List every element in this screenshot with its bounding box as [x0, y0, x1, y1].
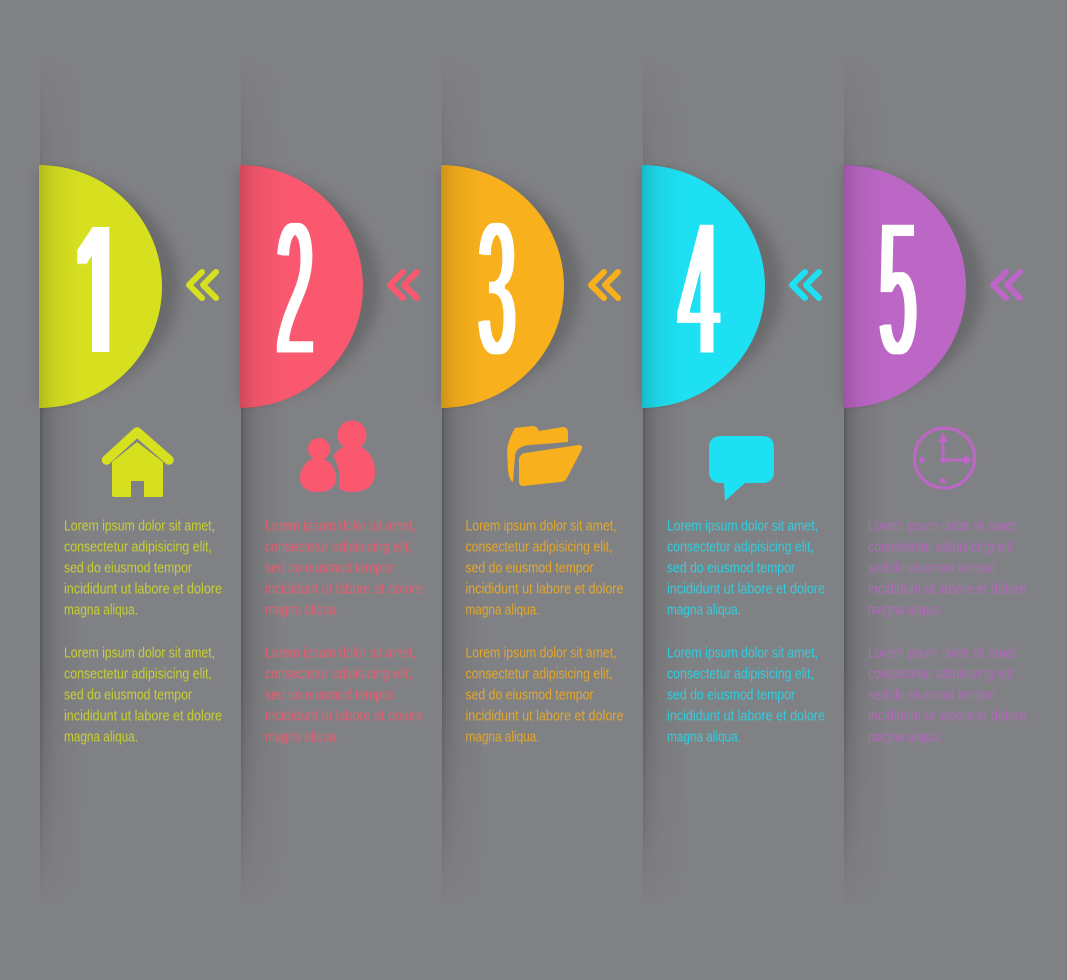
panel: step 1 [39, 165, 222, 746]
text block: sed do eiusmod tempor [868, 561, 996, 577]
text block: consectetur adipisicing elit [868, 667, 1013, 683]
panel: step 4 [642, 165, 825, 746]
text block: incididunt ut labore et dolore [667, 709, 825, 725]
text block: consectetur adipisicing elit, [265, 667, 412, 683]
text block: incididunt ut labore et dolore [667, 582, 825, 598]
semicircle shadow [642, 170, 782, 402]
text block: sed do eiusmod tempor [667, 688, 795, 704]
text block: sed do eiusmod tempor [64, 688, 192, 704]
text block: consectetur adipisicing elit, [265, 540, 412, 556]
text block: incididunt ut labore et dolore [466, 582, 624, 598]
text block: incididunt ut labore et dolore [64, 582, 222, 598]
text block: magna aliqua. [466, 603, 540, 619]
semicircle fold shading [843, 165, 885, 408]
semicircle fold shading [642, 165, 684, 408]
text block: incididunt ut labore et dolore [868, 582, 1026, 598]
text block: incididunt ut labore et dolore [868, 709, 1026, 725]
double chevron [189, 272, 216, 298]
text block: sed do eiusmod tempor [466, 561, 594, 577]
text block: magna aliqua. [265, 730, 339, 746]
text block: magna aliqua. [64, 730, 138, 746]
text block: Lorem ipsum dolor sit amet, [667, 646, 818, 662]
column edge shadows [40, 118, 860, 866]
semicircle [642, 165, 765, 408]
text block: magna aliqua. [667, 603, 741, 619]
text block: incididunt ut labore et dolore [265, 582, 423, 598]
text block: consectetur adipisicing elit, [466, 540, 612, 556]
number 4: 4 [679, 183, 719, 395]
icon: people [300, 420, 375, 492]
text block: Lorem ipsum dolor sit amet, [64, 519, 215, 535]
text block: Lorem ipsum dolor sit amet, [868, 646, 1019, 662]
text block: magna aliqua. [868, 730, 942, 746]
text block: consectetur adipisicing elit, [64, 540, 212, 556]
semicircle fold shading [240, 165, 282, 408]
icon: folder [507, 426, 582, 486]
double chevron [390, 272, 417, 298]
number 5: 5 [880, 183, 916, 395]
text block: consectetur adipisicing elit [868, 540, 1013, 556]
text block: magna aliqua. [667, 730, 741, 746]
text block: sed do eiusmod tempor [466, 688, 594, 704]
text block: sed do eiusmod tempor [667, 561, 795, 577]
text block: incididunt ut labore et dolore [466, 709, 624, 725]
text block: Lorem ipsum dolor sit amet, [64, 646, 215, 662]
text block: consectetur adipisicing elit, [466, 667, 612, 683]
text block: Lorem ipsum dolor sit amet, [868, 519, 1019, 535]
text block: consectetur adipisicing elit, [667, 540, 814, 556]
semicircle [843, 165, 966, 408]
text block: sed do eiusmod tempor [868, 688, 996, 704]
double chevron [792, 272, 819, 298]
panel: step 5 [843, 165, 1026, 746]
semicircle fold shading [441, 165, 483, 408]
text block: consectetur adipisicing elit, [667, 667, 814, 683]
text block [667, 519, 825, 746]
semicircle [240, 165, 363, 408]
text block: Lorem ipsum dolor sit amet, [466, 646, 616, 662]
semicircle shadow [240, 170, 380, 402]
text block [466, 519, 624, 746]
number 1: 1 [73, 182, 125, 413]
icon: clock [914, 428, 974, 488]
text block [265, 519, 423, 746]
text block: Lorem ipsum dolor sit amet, [265, 646, 416, 662]
text block: Lorem ipsum dolor sit amet, [667, 519, 818, 535]
number 2: 2 [277, 183, 313, 395]
double chevron [591, 272, 618, 298]
text block [868, 519, 1026, 746]
semicircle shadow [39, 170, 179, 402]
number 3: 3 [479, 183, 515, 395]
text block [64, 519, 222, 746]
panel: step 2 [240, 165, 423, 746]
text block: sed do eiusmod tempor [64, 561, 192, 577]
text block: sed do eiusmod tempor [265, 688, 393, 704]
double chevron [993, 272, 1020, 298]
text block: sed do eiusmod tempor [265, 561, 393, 577]
semicircle [39, 165, 162, 408]
text block: magna aliqua. [466, 730, 540, 746]
semicircle fold shading [39, 165, 81, 408]
icon: speech bubble [709, 436, 774, 501]
panel: step 3 [441, 165, 624, 746]
semicircle shadow [843, 170, 983, 402]
semicircle [441, 165, 564, 408]
text block: incididunt ut labore et dolore [64, 709, 222, 725]
text block: Lorem ipsum dolor sit amet, [466, 519, 616, 535]
text block: magna aliqua. [868, 603, 942, 619]
text block: Lorem ipsum dolor sit amet, [265, 519, 416, 535]
text block: magna aliqua. [64, 603, 138, 619]
text block: magna aliqua. [265, 603, 339, 619]
text block: incididunt ut labore et dolore [265, 709, 423, 725]
icon: house [106, 432, 169, 497]
semicircle shadow [441, 170, 581, 402]
text block: consectetur adipisicing elit, [64, 667, 212, 683]
